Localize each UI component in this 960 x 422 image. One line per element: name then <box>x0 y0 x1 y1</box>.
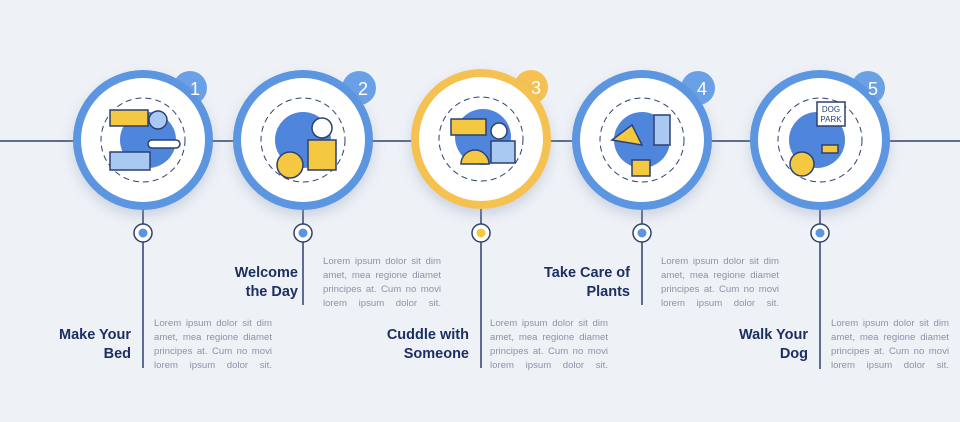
text: body 3: principes at. Cum no movi <box>490 346 608 357</box>
text: body 5: amet, mea regione diamet <box>831 332 949 343</box>
text: body 3: amet, mea regione diamet <box>490 332 608 343</box>
title: walk your dog: Walk Your <box>739 327 808 343</box>
text: body 1: amet, mea regione diamet <box>154 332 272 343</box>
text: body 2 <box>323 256 441 309</box>
title: take care of plants: Take Care of <box>544 265 630 281</box>
text: body 2: amet, mea regione diamet <box>323 270 441 281</box>
step 3 circle <box>411 69 551 368</box>
step 2 circle <box>233 70 376 305</box>
title: make your bed: Make Your <box>59 327 131 343</box>
text: body 1: principes at. Cum no movi <box>154 346 272 357</box>
title: cuddle with someone <box>387 327 469 362</box>
step 5 circle: PARK <box>820 115 842 124</box>
step 4 circle <box>572 70 715 305</box>
title: take care of plants <box>544 265 630 300</box>
step 2 circle: 2 <box>358 79 368 99</box>
title: welcome the day: the Day <box>246 284 298 300</box>
text: body 4 <box>661 256 779 309</box>
step 4 circle: 4 <box>697 79 707 99</box>
step 1 circle <box>73 70 213 368</box>
text: body 4: lorem ipsum dolor sit. <box>661 298 779 309</box>
title: cuddle with someone: Cuddle with <box>387 327 469 343</box>
text: body 5: principes at. Cum no movi <box>831 346 949 357</box>
text: body 5: lorem ipsum dolor sit. <box>831 360 949 371</box>
text: body 4: principes at. Cum no movi <box>661 284 779 295</box>
text: body 3 <box>490 318 608 371</box>
text: body 2: lorem ipsum dolor sit. <box>323 298 441 309</box>
step 5 circle: DOG <box>822 105 840 114</box>
text: body 2: principes at. Cum no movi <box>323 284 441 295</box>
title: walk your dog <box>739 327 808 362</box>
text: body 1: Lorem ipsum dolor sit dim <box>154 318 272 329</box>
text: body 3: lorem ipsum dolor sit. <box>490 360 608 371</box>
text: body 4: amet, mea regione diamet <box>661 270 779 281</box>
title: welcome the day: Welcome <box>235 265 298 281</box>
text: body 1 <box>154 318 272 371</box>
title: make your bed <box>59 327 131 362</box>
text: body 5 <box>831 318 949 371</box>
title: take care of plants: Plants <box>586 284 630 300</box>
step 5 circle <box>750 70 890 369</box>
title: make your bed: Bed <box>104 346 131 362</box>
text: body 5: Lorem ipsum dolor sit dim <box>831 318 949 329</box>
text: body 3: Lorem ipsum dolor sit dim <box>490 318 608 329</box>
title: walk your dog: Dog <box>780 346 808 362</box>
text: body 1: lorem ipsum dolor sit. <box>154 360 272 371</box>
title: welcome the day <box>234 265 298 300</box>
text: body 2: Lorem ipsum dolor sit dim <box>323 256 441 267</box>
step 5 circle: 5 <box>868 79 878 99</box>
step 1 circle: 1 <box>190 79 200 99</box>
title: cuddle with someone: Someone <box>404 346 469 362</box>
step 3 circle: 3 <box>531 78 541 98</box>
text: body 4: Lorem ipsum dolor sit dim <box>661 256 779 267</box>
